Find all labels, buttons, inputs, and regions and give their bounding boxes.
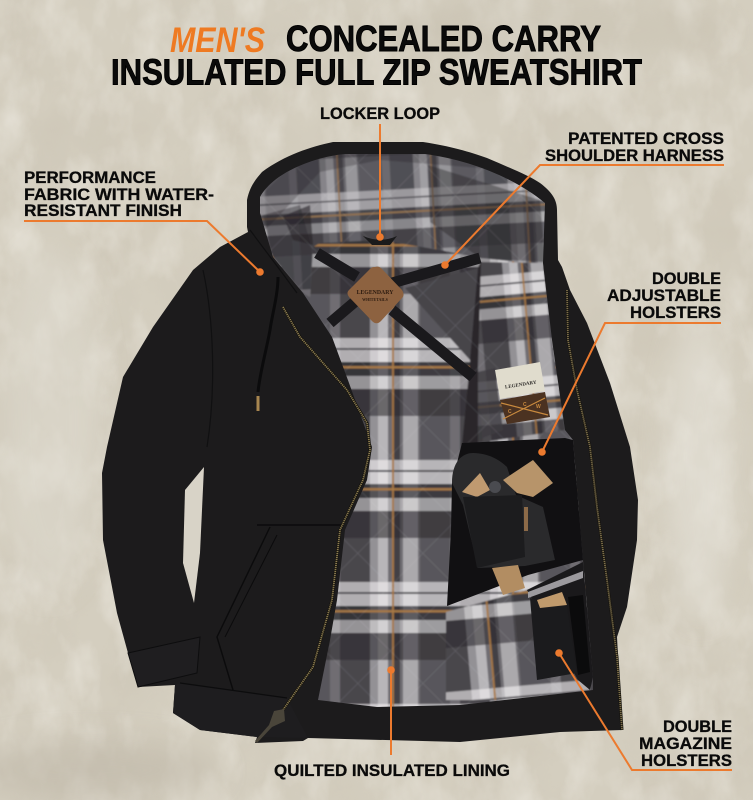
callout: quilted insulated lining: QUILTED INSULATED LINING [274, 762, 510, 780]
drawstring tip [256, 396, 260, 411]
callout: double magazine holsters: HOLSTERS [641, 752, 732, 770]
sewn-in label: C [508, 409, 512, 415]
gun grip [503, 460, 553, 497]
hood tone overlay [255, 150, 548, 297]
hood lining plaid [255, 150, 548, 297]
jacket black shell [102, 142, 638, 743]
sleeve cuff [128, 637, 200, 687]
title [111, 18, 642, 92]
sewn-in label: W [536, 404, 541, 410]
lower placket band [527, 562, 593, 690]
zipper pull [255, 709, 285, 743]
right lining panel [477, 261, 565, 442]
callout: locker loop: LOCKER LOOP [320, 105, 440, 123]
cross shoulder harness straps [317, 253, 480, 377]
callout: quilted insulated lining [274, 666, 510, 780]
dark strip beside right panel [462, 262, 481, 445]
left zipper [283, 307, 370, 710]
double adjustable holster [452, 453, 555, 595]
callout: locker loop [320, 105, 440, 241]
leather patch [348, 267, 404, 323]
callout: double adjustable holsters [538, 270, 721, 456]
locker loop [363, 236, 397, 245]
sweatshirt photo illustration [102, 140, 638, 743]
callout: double adjustable holsters: HOLSTERS [630, 304, 721, 322]
gun slide [462, 473, 490, 497]
callout: performance fabric [24, 169, 264, 276]
callout: double magazine holsters [555, 649, 732, 770]
title line 2: INSULATED FULL ZIP SWEATSHIRT [111, 52, 642, 92]
callout: patented cross shoulder harness: PATENTED CROSS [568, 130, 724, 148]
callout: performance fabric: PERFORMANCE [24, 169, 156, 187]
quilting stitches [266, 154, 561, 702]
velcro panel [447, 438, 583, 606]
gun barrel [492, 565, 525, 595]
holster pocket [463, 495, 525, 568]
callout: patented cross shoulder harness: SHOULDER HARNESS [545, 147, 724, 165]
gap between sleeve and body [183, 467, 204, 603]
plaid lining [250, 140, 600, 710]
hood side shadows [263, 205, 312, 297]
sewn-in label: LEGENDARY [505, 380, 537, 390]
double magazine holster [530, 592, 590, 680]
shoulder seam [203, 230, 297, 447]
sewn-in label [495, 362, 550, 424]
lower plaid panel [446, 570, 590, 700]
leather patch: WHITETAILS [362, 297, 389, 302]
right zipper [567, 290, 622, 730]
callout: patented cross shoulder harness [441, 130, 724, 269]
title line 1: CONCEALED CARRY [286, 18, 601, 59]
sewn-in label: C [523, 402, 527, 408]
callout: performance fabric: FABRIC WITH WATER- [24, 186, 214, 204]
callout: double magazine holsters: MAGAZINE [639, 735, 732, 753]
title accent: Men's: MEN'S [170, 21, 265, 60]
callout: double magazine holsters: DOUBLE [663, 718, 732, 736]
dark fold between straps [405, 268, 478, 360]
bottom hem rib [173, 683, 308, 738]
callout: performance fabric: RESISTANT FINISH [24, 202, 182, 220]
callout: double adjustable holsters: DOUBLE [652, 270, 721, 288]
leather patch: LEGENDARY [357, 290, 394, 296]
drawstring [258, 277, 278, 392]
callout: double adjustable holsters: ADJUSTABLE [607, 287, 721, 305]
kangaroo pocket [217, 525, 343, 690]
